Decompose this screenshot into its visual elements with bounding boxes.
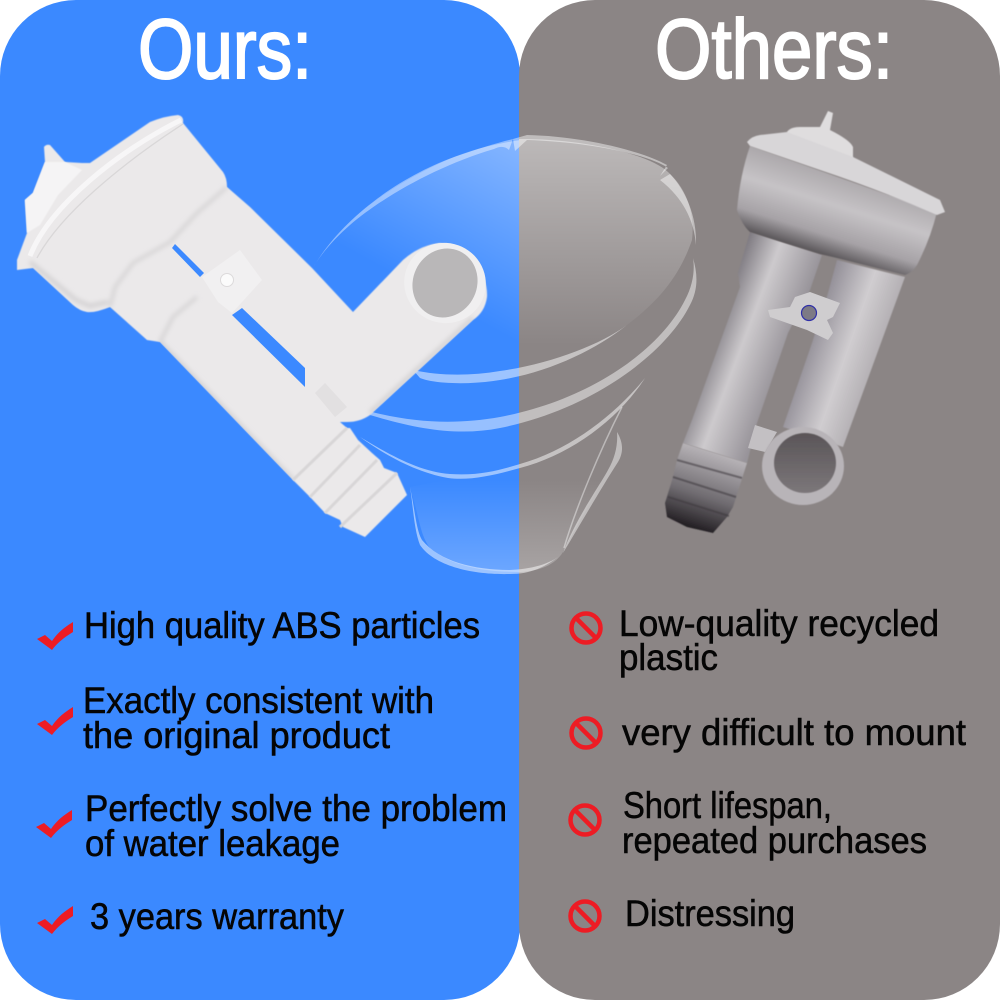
- valve: brace hole: [220, 274, 234, 286]
- valve: left pipe: [683, 232, 822, 463]
- heading: ours: Ours:: [138, 2, 312, 96]
- valve: flange: [747, 132, 945, 215]
- text: distressing: Distressing: [625, 893, 795, 934]
- text: consistent: Exactly consistent with: [83, 680, 434, 721]
- valve: cap: [787, 111, 853, 160]
- text: perfectly solve: Perfectly solve the problem: [85, 788, 507, 829]
- valve: slot 2: [232, 308, 305, 387]
- icon: check 4: [37, 906, 73, 934]
- icon: prohibited 4: [570, 902, 600, 930]
- icon: prohibited 1: [572, 614, 600, 642]
- text: water leakage: of water leakage: [85, 823, 340, 864]
- text: original product: the original product: [83, 715, 391, 756]
- text: purchases: repeated purchases: [622, 820, 927, 861]
- valve: cross brace: [768, 292, 840, 340]
- product photo: others (grey valve): [665, 111, 945, 533]
- others list: [570, 603, 967, 934]
- heading: others: Others:: [655, 2, 893, 96]
- text: difficult: very difficult to mount: [622, 712, 967, 753]
- icon: check 1: [37, 622, 73, 650]
- valve: right pipe: [783, 260, 905, 447]
- valve: brace hole: [802, 306, 816, 320]
- panel: ours (blue): [0, 0, 520, 1000]
- icon: check 3: [36, 810, 72, 838]
- valve: cup body: [737, 146, 937, 275]
- valve: top cap: [25, 162, 82, 233]
- text: abs particles: High quality ABS particles: [84, 605, 480, 646]
- valve: brace: [202, 250, 262, 313]
- valve: pipe end ring: [762, 427, 844, 505]
- text: warranty: 3 years warranty: [90, 896, 344, 937]
- panel: others (grey): [519, 0, 1000, 1000]
- ours list: [36, 605, 507, 937]
- text: lifespan: Short lifespan,: [623, 785, 832, 826]
- valve body silhouette: [17, 115, 487, 537]
- valve: connector stub: [748, 425, 777, 452]
- valve: slot 1: [172, 244, 204, 277]
- valve: flange highlight: [30, 120, 181, 256]
- valve: pipe opening: [774, 433, 836, 493]
- toilet outline watermark: [313, 135, 696, 574]
- product photo: ours (white valve): [17, 115, 499, 537]
- valve: flange edge: [37, 124, 183, 258]
- valve: mouth ring: [391, 229, 499, 337]
- valve: mouth opening: [401, 238, 489, 328]
- valve: barb ribs: [668, 460, 742, 516]
- icon: check 2: [37, 707, 73, 735]
- valve: barb: [665, 443, 747, 533]
- icon: prohibited 2: [572, 718, 600, 748]
- text: recycled: Low-quality recycled: [619, 603, 939, 644]
- valve: stub: [315, 383, 347, 417]
- valve: soft shading: [30, 187, 473, 480]
- valve: barb ribs: [293, 428, 397, 527]
- text: plastic: plastic: [619, 637, 718, 678]
- icon: prohibited 3: [570, 806, 600, 834]
